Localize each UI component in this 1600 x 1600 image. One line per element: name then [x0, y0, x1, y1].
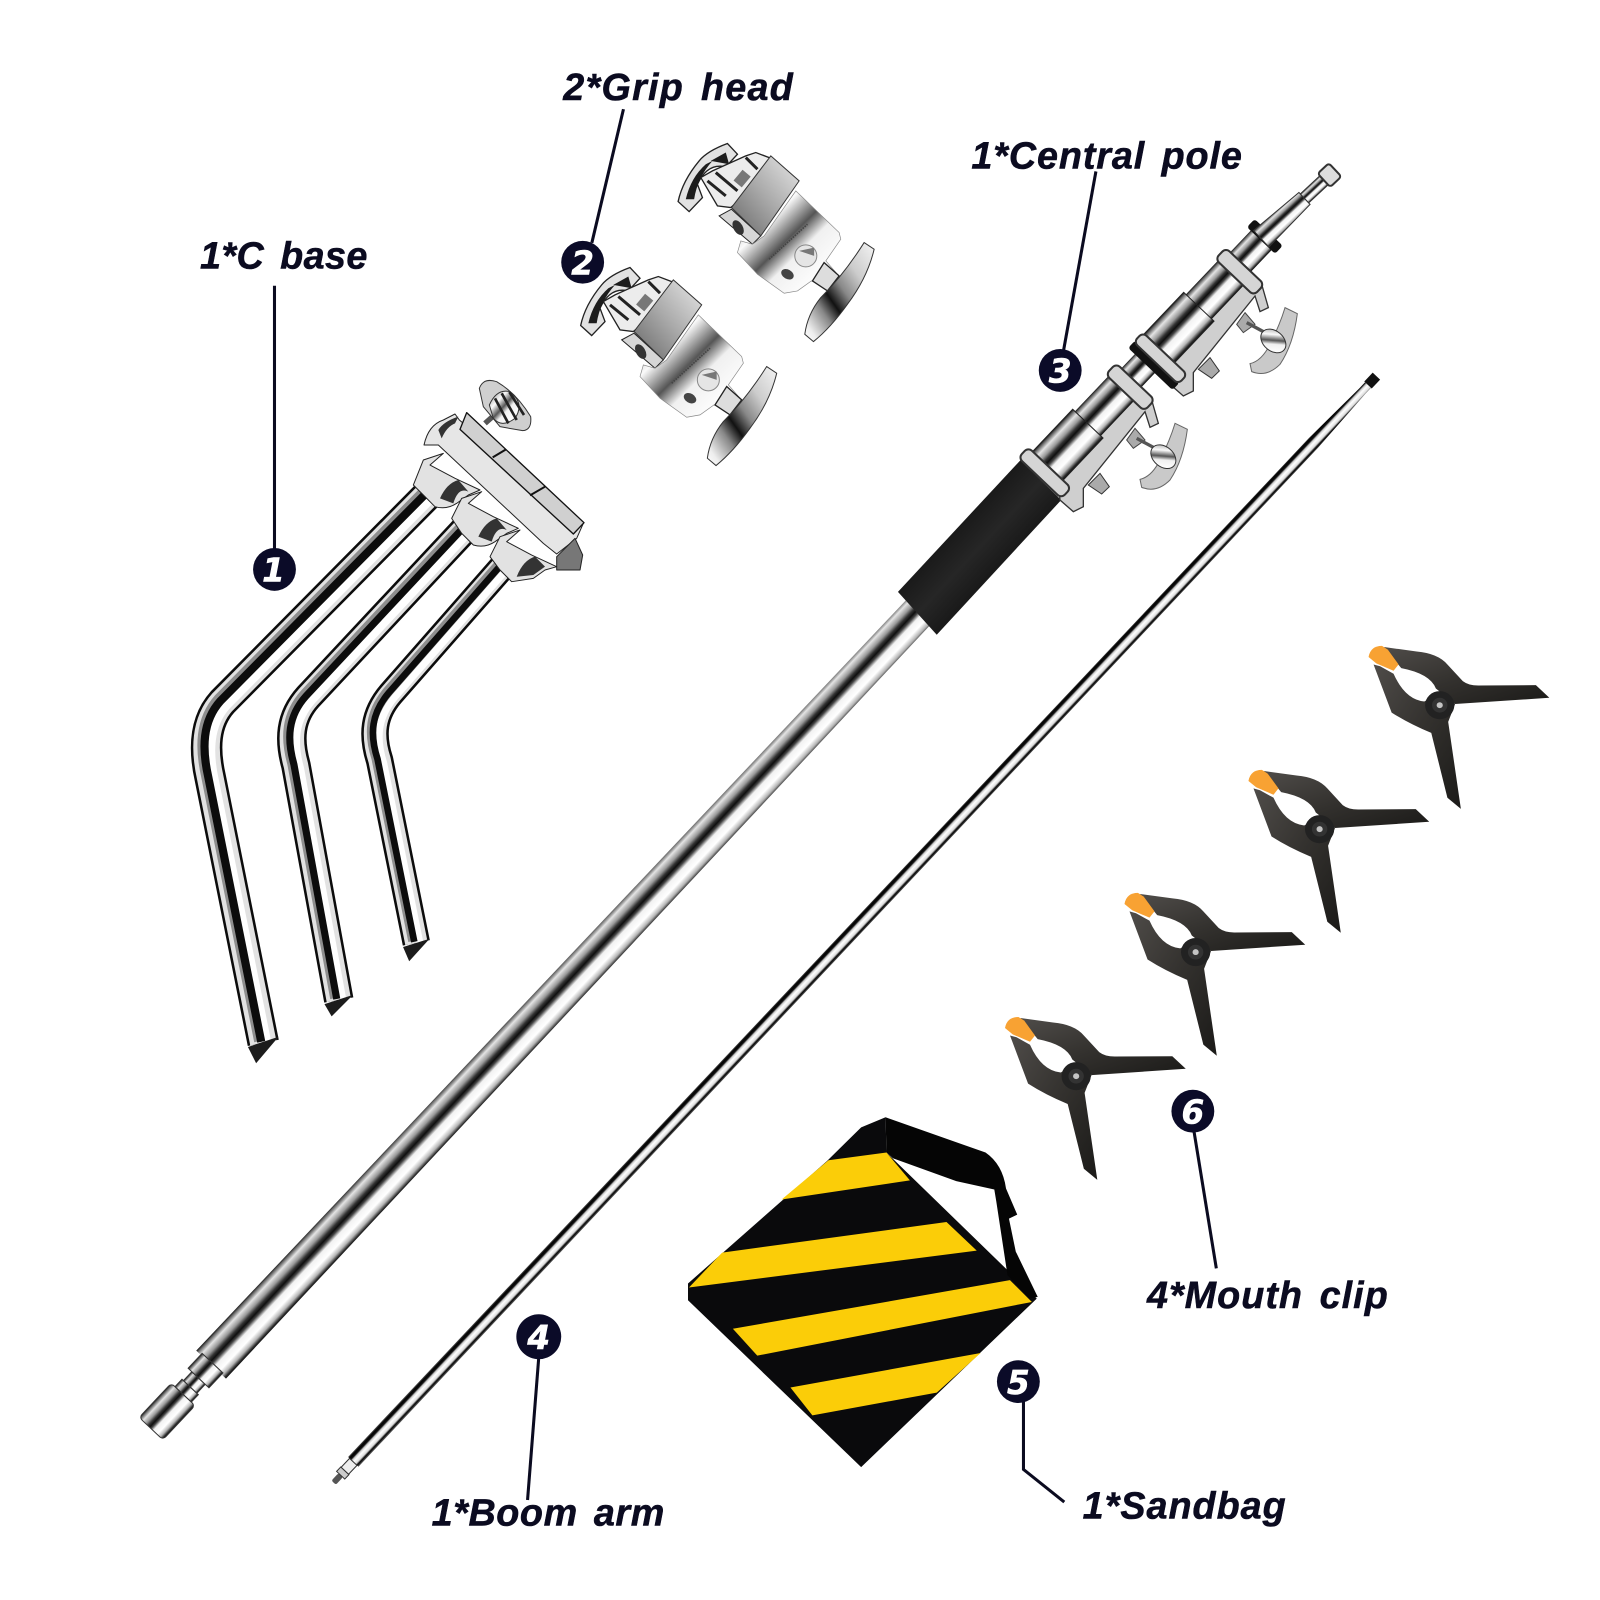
badge: 2: 2 [571, 244, 594, 282]
badge: 1 [253, 548, 296, 591]
leg 3 [373, 558, 512, 961]
bag body [688, 1117, 1037, 1467]
bottom connector [139, 1352, 224, 1440]
leader line: sandbag [1023, 1400, 1064, 1502]
badge: 3: 3 [1049, 353, 1072, 391]
badge: 5: 5 [1007, 1364, 1030, 1402]
label: 1*C base: 1*C base [200, 234, 367, 276]
spring clip 1 [1005, 1017, 1186, 1180]
pole tube [196, 598, 933, 1379]
leader line: central pole [1063, 171, 1096, 352]
badge: 3 [1039, 349, 1082, 392]
black foam grip [898, 460, 1061, 635]
badge: 6: 6 [1181, 1093, 1204, 1131]
leader line: boom arm [528, 1357, 539, 1500]
sandbag [688, 1117, 1038, 1467]
spring clip 4 [1369, 646, 1549, 809]
label: 1*Boom arm: 1*Boom arm [432, 1492, 664, 1534]
badge: 1: 1 [262, 552, 285, 590]
grip head, upper [678, 144, 874, 342]
badge: 5 [997, 1360, 1040, 1403]
label: 1*Central pole: 1*Central pole [971, 134, 1242, 176]
leg head clamp [413, 380, 584, 582]
label: 1*Sandbag: 1*Sandbag [1083, 1484, 1286, 1526]
leg 2 [290, 522, 473, 1016]
bar segments [460, 413, 584, 534]
clamp with knob, upper [1168, 274, 1297, 396]
leader line: mouth clip [1194, 1131, 1216, 1268]
yellow stripes [689, 1153, 1032, 1415]
wing knob [479, 380, 531, 431]
leader line: grip head [592, 109, 623, 243]
leg 1 [205, 492, 433, 1063]
grip head, lower [581, 268, 777, 466]
central pole: lower tube and connector [136, 598, 933, 1443]
spring clip 3 [1248, 770, 1429, 933]
spring clip 2 [1124, 893, 1305, 1056]
collars [1018, 214, 1297, 503]
badge: 6 [1171, 1090, 1214, 1133]
top spigot [1254, 162, 1343, 247]
tubes [1031, 224, 1279, 482]
leader line: C base [273, 286, 276, 551]
badge: 2 [561, 241, 604, 284]
label: 2*Grip head: 2*Grip head [562, 66, 794, 108]
boom arm [328, 371, 1382, 1488]
carrying strap [886, 1117, 1038, 1299]
main bar [424, 414, 583, 554]
label: 4*Mouth clip: 4*Mouth clip [1146, 1274, 1388, 1316]
central pole: upper telescopic section [1018, 214, 1297, 503]
end bolt [557, 538, 583, 570]
badge: 4: 4 [526, 1319, 550, 1357]
clamp with knob, lower [1058, 390, 1187, 512]
C base: three-leg assembly [205, 380, 584, 1063]
sockets [413, 453, 557, 582]
badge: 4 [516, 1314, 561, 1359]
